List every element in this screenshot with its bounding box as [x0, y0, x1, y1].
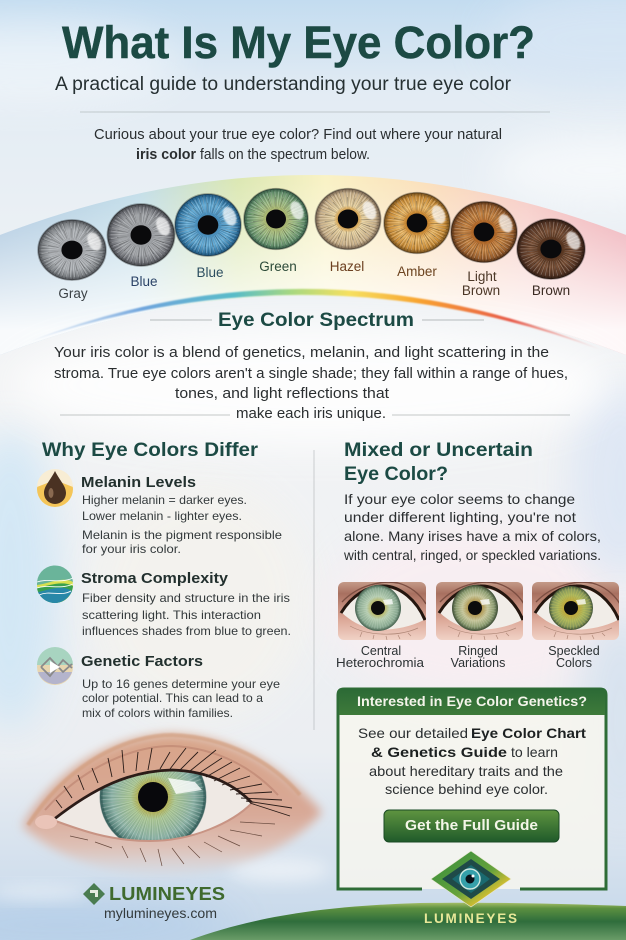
- subtitle: A practical guide to understanding your true eye color: [55, 74, 512, 95]
- heading: Why Eye Colors Differ: [42, 439, 258, 461]
- heading: Mixed or Uncertain: [344, 439, 533, 461]
- photo: central heterochromia: [338, 582, 426, 640]
- button: [384, 810, 559, 842]
- label: speckled colors: [548, 644, 600, 670]
- label: ringed variations: Ringed: [458, 644, 498, 658]
- iris: brown: [517, 219, 585, 279]
- description: with central, ringed, or speckled variations.: [343, 547, 601, 563]
- description: [343, 491, 601, 563]
- brand: lumineyes: LUMINEYES: [109, 884, 225, 904]
- melanin levels: for your iris color.: [82, 542, 181, 556]
- photo: ringed variations: [436, 582, 524, 640]
- label: ringed variations: Variations: [451, 656, 505, 670]
- genetic factors: [81, 654, 280, 720]
- spectrum heading: Eye Color Spectrum: [218, 310, 414, 331]
- callout: genetics guide: [338, 689, 606, 889]
- heading: Eye Color?: [344, 463, 448, 485]
- iris: green: [244, 189, 308, 249]
- genetic factors: color potential. This can lead to a: [82, 691, 263, 705]
- label: ringed variations: [451, 644, 505, 670]
- stroma complexity: Stroma Complexity: [81, 571, 228, 587]
- icon: melanin drop: [37, 469, 73, 507]
- genetic factors: mix of colors within families.: [82, 706, 233, 720]
- spectrum paragraph: [54, 344, 570, 422]
- callout text: science behind eye color.: [385, 781, 548, 797]
- label: central heterochromia: [336, 644, 424, 670]
- genetic factors: Up to 16 genes determine your eye: [82, 677, 280, 691]
- label: light brown: Brown: [462, 283, 500, 298]
- callout text: to learn: [511, 744, 558, 760]
- icon: genetics: [37, 647, 73, 685]
- intro text: [94, 126, 502, 163]
- iris: hazel: [315, 189, 381, 249]
- stroma complexity: Fiber density and structure in the iris: [82, 591, 290, 605]
- callout text: about hereditary traits and the: [369, 763, 563, 779]
- hero eye photo: [22, 734, 322, 875]
- upper lashes: [56, 748, 292, 816]
- label: brown: Brown: [532, 283, 570, 298]
- spectrum paragraph: Your iris color is a blend of genetics, melanin, and light scattering in the: [54, 344, 549, 361]
- hill: [190, 903, 626, 940]
- callout text: See our detailed: [358, 725, 468, 741]
- intro text: Curious about your true eye color? Find out where your natural: [94, 126, 502, 143]
- melanin levels: Melanin is the pigment responsible: [82, 528, 282, 542]
- iris: amber: [384, 193, 450, 253]
- callout text: & Genetics Guide: [371, 744, 507, 760]
- iris: light brown: [451, 202, 517, 262]
- panel: mixed or uncertain eye color: [336, 439, 620, 670]
- callout text: Eye Color Chart: [471, 725, 586, 741]
- heading: [344, 439, 533, 485]
- stroma complexity: [81, 571, 291, 638]
- label: amber: Amber: [397, 264, 437, 279]
- label: central heterochromia: Central: [361, 644, 401, 658]
- label: green: Green: [259, 259, 297, 274]
- description: under different lighting, you're not: [344, 509, 576, 525]
- label: blue: Blue: [196, 265, 224, 280]
- icon: stroma waves: [37, 565, 73, 603]
- callout header: Interested in Eye Color Genetics?: [357, 693, 587, 709]
- iris: gray: [38, 220, 106, 280]
- melanin levels: Lower melanin - lighter eyes.: [82, 509, 242, 523]
- intro text: falls on the spectrum below.: [200, 146, 370, 163]
- lower lashes: [70, 822, 275, 866]
- stroma complexity: influences shades from blue to green.: [82, 624, 291, 638]
- intro text: iris color: [136, 146, 196, 163]
- melanin levels: Melanin Levels: [81, 475, 196, 491]
- website: mylumineyes.com: [104, 906, 217, 921]
- iris: blue: [175, 194, 241, 256]
- panel: why eye colors differ: [37, 439, 291, 720]
- stroma complexity: scattering light. This interaction: [82, 608, 261, 622]
- melanin levels: [81, 475, 282, 556]
- label: speckled colors: Speckled: [548, 644, 600, 658]
- logo wordmark: bottom right: LUMINEYES: [424, 911, 517, 926]
- description: alone. Many irises have a mix of colors,: [344, 528, 601, 544]
- genetic factors: Genetic Factors: [81, 654, 203, 670]
- spectrum arc band: [0, 175, 626, 445]
- callout text: [358, 725, 586, 797]
- spectrum paragraph: stroma. True eye colors aren't a single shade; they fall within a range of hues,: [54, 365, 568, 382]
- label: light brown: Light: [467, 269, 497, 284]
- label: central heterochromia: Heterochromia: [336, 656, 424, 670]
- label: light brown: [462, 269, 500, 298]
- title: What Is My Eye Color?: [62, 17, 535, 68]
- brand: lumineyes: [83, 883, 225, 921]
- melanin levels: Higher melanin = darker eyes.: [82, 493, 247, 507]
- label: blue: Blue: [130, 274, 158, 289]
- button: Get the Full Guide: [405, 818, 538, 834]
- label: gray: Gray: [58, 286, 88, 301]
- spectrum paragraph: tones, and light reflections that: [175, 385, 390, 402]
- label: speckled colors: Colors: [556, 656, 592, 670]
- logo: diamond eye emblem: [431, 851, 511, 907]
- spectrum paragraph: make each iris unique.: [236, 405, 386, 422]
- iris: blue-gray: [107, 204, 175, 266]
- rainbow arc: [28, 289, 602, 350]
- photo: speckled colors: [532, 582, 620, 640]
- description: If your eye color seems to change: [344, 491, 575, 507]
- label: hazel: Hazel: [330, 259, 364, 274]
- icon: brand diamond: [83, 883, 105, 905]
